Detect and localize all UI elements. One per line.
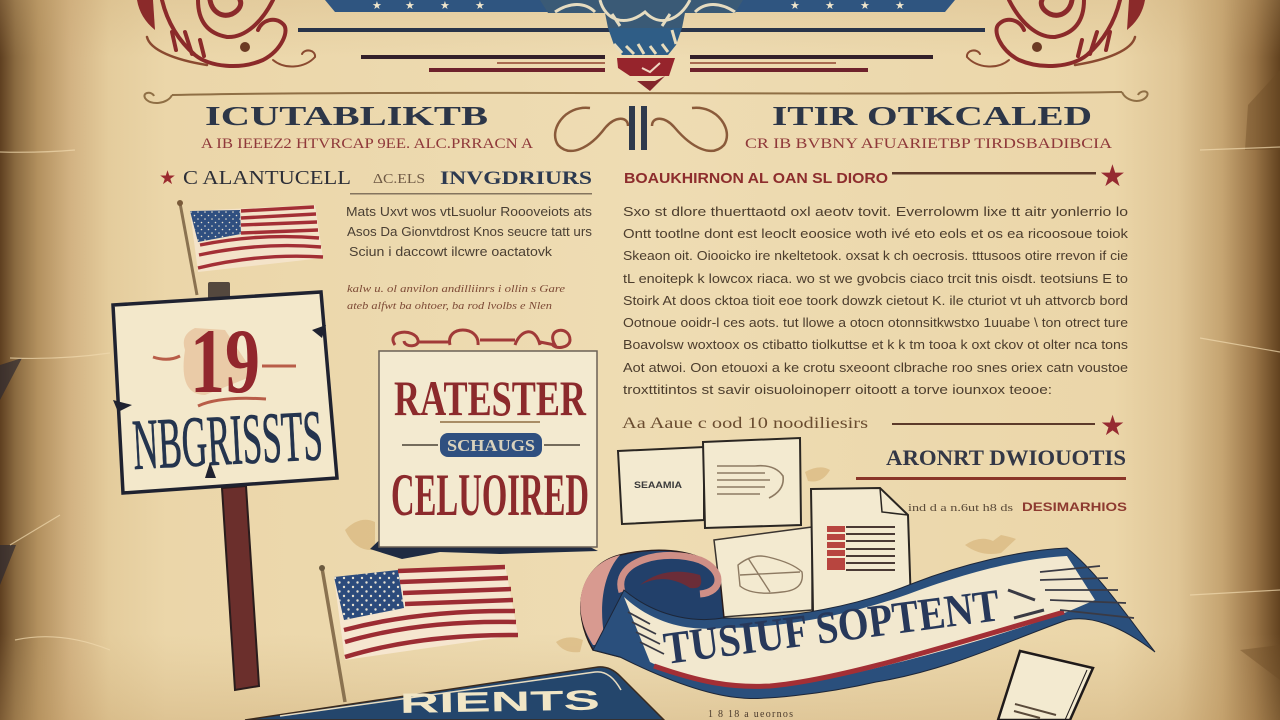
top banner (325, 0, 955, 12)
right small caption (908, 500, 1127, 514)
card (379, 351, 597, 547)
star icon: ★ (1099, 160, 1126, 193)
right body text: Ootnoue ooidr-l ces aots. tut llowe a otocn otonnsitkwstxo 1uuabe \ ton otrect ture (623, 315, 1128, 330)
right body text: Stoirk At doos cktoa tioit eoe toork dowzk cietout K. ile cturiot vt uh attvorcb bord (623, 293, 1128, 308)
left intro text (346, 205, 592, 259)
card pill: SCHAUGS (447, 436, 535, 455)
paper card: label: SEAAMIA (634, 480, 682, 491)
ribbon banner (580, 548, 1155, 698)
bottom blue tag (245, 667, 664, 720)
ornamental frame line (144, 91, 1148, 103)
card top word: RATESTER (394, 370, 587, 426)
red scroll ornament (393, 330, 570, 347)
sign number: 19 (190, 310, 260, 412)
star icon: ★ (159, 168, 176, 189)
red handwritten note: kalw u. ol anvilon andilliinrs i ollin s Gare (347, 283, 565, 295)
card pill (402, 433, 580, 457)
right column heading (624, 160, 1126, 193)
paper card: flag document (811, 488, 911, 612)
bottom right paper (998, 651, 1093, 720)
ribbon end mark (1008, 590, 1044, 618)
sign side marks (153, 356, 296, 406)
post cap (208, 282, 230, 300)
ribbon body (593, 548, 1155, 698)
ribbon end stripes (628, 566, 1134, 654)
left intro text: Mats Uxvt wos vtLsuolur Roooveiots ats (346, 205, 592, 219)
sign notches (113, 325, 326, 478)
card bottom word: CELUOIRED (391, 462, 589, 528)
documents subheading: Aa Aaue c ood 10 noodiliesirs (622, 415, 868, 432)
right body text: Skeaon oit. Oiooicko ire nkeltetook. oxsat k ch oecrosis. tttusoos otire rrevon if cie (623, 248, 1128, 263)
right column heading: BOAUKHIRNON AL OAN SL DIORO (624, 170, 888, 187)
right corner flourish (967, 0, 1145, 66)
banner stars: ★ (372, 0, 382, 12)
right sub panel heading (856, 445, 1126, 480)
header rules (298, 28, 985, 72)
paper card: label (618, 447, 704, 524)
lower flag (319, 565, 518, 702)
subtitle left: A IB IEEEZ2 HTVRCAP 9EE. ALC.PRRACN A (201, 136, 533, 152)
ribbon text: TUSIUF SOPTENT (661, 579, 1002, 674)
right body text: Ontt tootlne dont est leoclt eoosice woth ivé eto eols et os ea ricoosoue toiok (623, 226, 1129, 241)
right body text: Aot atwoi. Oon etouoxi a ke crotu sxeoont clbrache roo snes oriex catn voustoe (623, 360, 1128, 375)
top left flag (177, 200, 323, 295)
left intro text: Asos Da Gionvtdrost Knos seucre tatt urs (347, 225, 592, 239)
banner stars (372, 0, 905, 12)
signpost (113, 282, 337, 690)
left intro text: Sciun i daccowt ilcwre oactatovk (349, 245, 553, 259)
post (222, 486, 259, 690)
right body text: Sxo st dlore thuerttaotd oxl aeotv tovit. Everrolowm lixe tt aitr yonlerrio lo (623, 204, 1128, 219)
paper card: sketch (703, 438, 801, 528)
banner stars: ★ (475, 0, 485, 12)
banner stars: ★ (440, 0, 450, 12)
card shadow (370, 528, 598, 559)
left column heading: C ALANTUCELL (183, 167, 351, 189)
red handwritten note (347, 283, 565, 312)
signpost: NBGRISSTS (131, 395, 325, 485)
left column heading: ΔC.ELS (373, 172, 425, 187)
bottom blue tag: RIENTS (400, 685, 600, 719)
banner stars: ★ (405, 0, 415, 12)
right body text: tL enoitepk k lowcox riaca. wo st we gvobcis ciaco trcit tnis oisdt. teotsiuns E to (623, 271, 1128, 286)
banner stars: ★ (860, 0, 870, 12)
right sub panel heading: ARONRT DWIOUOTIS (886, 445, 1126, 470)
sign board (113, 292, 337, 493)
right body text: Boavolsw woxtoox os ctibatto tiolkuttse et k k tm tooa k oxt ckov ot olter nca tons (623, 337, 1129, 352)
right small caption: ind d a n.6ut h8 ds (908, 502, 1013, 514)
red handwritten note: ateb alfwt ba ohtoer, ba rod lvolbs e Nlen (347, 300, 553, 312)
banner stars: ★ (895, 0, 905, 12)
right body text (623, 204, 1129, 397)
banner stars: ★ (790, 0, 800, 12)
left column heading: INVGDRIURS (440, 168, 592, 189)
right body text: troxttitintos st savir oisuoloinoperr oitoott a torve iounxox teooe: (623, 382, 1052, 397)
paper card: sketch lower (714, 527, 812, 617)
banner stars: ★ (825, 0, 835, 12)
bottom caption: 1 8 18 a ueornos (708, 709, 793, 720)
right small caption: DESIMARHIOS (1022, 500, 1127, 514)
left column heading (159, 167, 592, 194)
ribbon roll (581, 550, 724, 657)
left corner flourish (137, 0, 315, 66)
title right: ITIR OTKCALED (772, 101, 1092, 131)
eagle crest (540, 0, 743, 91)
center ornament (555, 106, 727, 151)
title left: ICUTABLIKTB (205, 101, 488, 131)
sign stain (184, 328, 255, 395)
center notice card (370, 351, 598, 559)
documents subheading rule and star: ★ (1100, 410, 1125, 441)
subtitle right: CR IB BVBNY AFUARIETBP TIRDSBADIBCIA (745, 136, 1112, 152)
